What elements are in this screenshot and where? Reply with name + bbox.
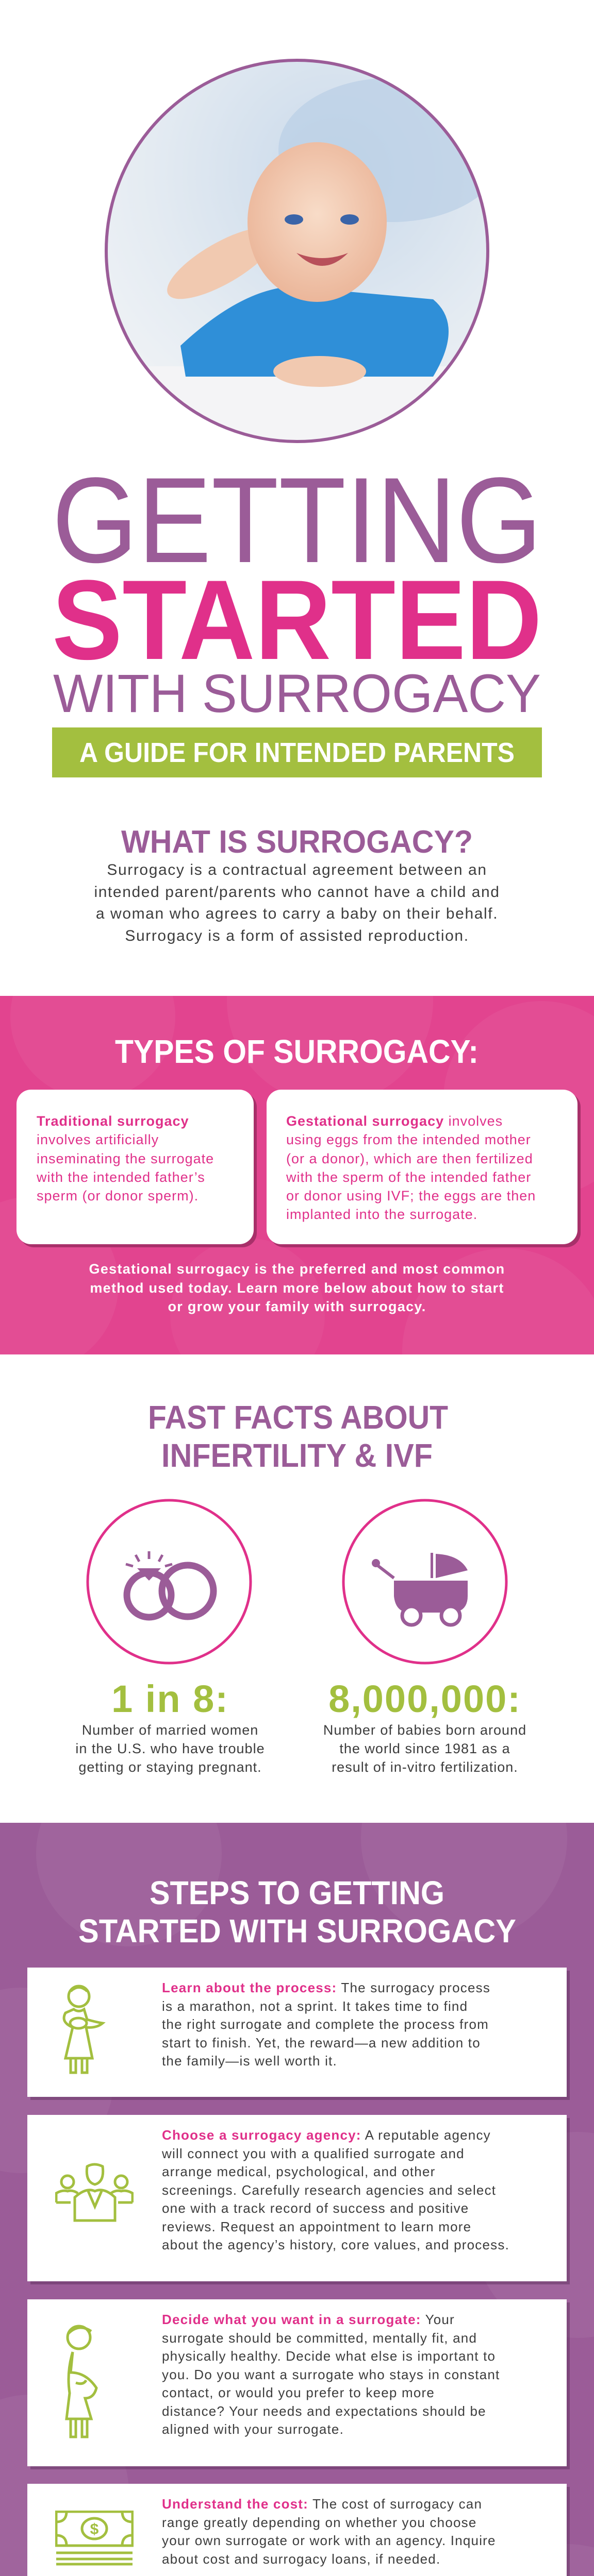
text: gestational note	[89, 1261, 505, 1314]
step 2: choose a surrogacy agency: about the agency’s history, core values, and process.	[162, 2237, 509, 2252]
step 4: understand the cost: range greatly depending on whether you choose	[162, 2514, 477, 2530]
step 4: understand the cost	[27, 2484, 567, 2576]
card: traditional surrogacy: with the intended father’s	[37, 1170, 205, 1185]
title: getting started with surrogacy: STARTED	[52, 556, 542, 683]
stat: 1 in 8: in the U.S. who have trouble	[75, 1741, 265, 1756]
hero photo: baby in circle	[105, 59, 489, 443]
step 3: decide what you want in a surrogate: you. Do you want a surrogate who stays in constant	[162, 2367, 500, 2382]
title: getting started with surrogacy	[52, 464, 542, 721]
step 3: decide what you want in a surrogate: aligned with your surrogate.	[162, 2421, 344, 2437]
step 3: decide what you want in a surrogate: Decide what you want in a surrogate: Your	[162, 2312, 455, 2327]
heading: fast facts: INFERTILITY & IVF	[161, 1437, 433, 1473]
step 4: understand the cost: Understand the cost: The cost of surrogacy can	[162, 2496, 482, 2512]
step 4: understand the cost: your own surrogate or work with an agency. Inquire	[162, 2533, 496, 2548]
card: gestational surrogacy: implanted into the surrogate.	[286, 1207, 477, 1222]
step 1: learn about the process: is a marathon, not a sprint. It takes time to find	[162, 1998, 468, 2013]
text: gestational note: method used today. Learn more below about how to start	[90, 1280, 504, 1295]
step 1: learn about the process: Learn about the process: The surrogacy process	[162, 1980, 490, 1995]
icon: agency people	[55, 2163, 134, 2222]
stat: 8,000,000: Number of babies born around	[323, 1722, 526, 1738]
card: gestational surrogacy: or donor using IVF; the eggs are then	[286, 1188, 536, 1204]
stat: 8,000,000: the world since 1981 as a	[339, 1741, 510, 1756]
step 3: decide what you want in a surrogate: distance? Your needs and expectations should be	[162, 2403, 486, 2418]
card: gestational surrogacy: using eggs from the intended mother	[286, 1132, 531, 1147]
text: gestational note: or grow your family with surrogacy.	[168, 1299, 426, 1314]
text: surrogacy definition	[94, 861, 500, 944]
step 2: choose a surrogacy agency: Choose a surrogacy agency: A reputable agency	[162, 2127, 491, 2143]
stat: 8,000,000: result of in-vitro fertilization.	[332, 1759, 518, 1775]
step 2: choose a surrogacy agency: reviews. Request an appointment to learn more	[162, 2218, 471, 2234]
stat: 1 in 8	[75, 1677, 265, 1775]
icon: mother with baby	[63, 1985, 106, 2074]
card: gestational surrogacy: Gestational surrogacy involves	[286, 1113, 503, 1129]
text: surrogacy definition: a woman who agrees to carry a baby on their behalf.	[96, 905, 498, 922]
step 3: decide what you want in a surrogate	[27, 2299, 567, 2466]
icon: money	[55, 2511, 134, 2566]
panel: types of surrogacy	[0, 996, 594, 1354]
text: surrogacy definition: Surrogacy is a form of assisted reproduction.	[125, 927, 469, 944]
step 1: learn about the process: the right surrogate and complete the process from	[162, 2016, 489, 2032]
step 2: choose a surrogacy agency: arrange medical, psychological, and other	[162, 2164, 435, 2179]
step 2: choose a surrogacy agency: one with a track record of success and positive	[162, 2200, 469, 2216]
text: gestational note: Gestational surrogacy is the preferred and most common	[89, 1261, 505, 1277]
card: gestational surrogacy	[267, 1090, 578, 1244]
step 2: choose a surrogacy agency	[27, 2115, 567, 2281]
card: traditional surrogacy: sperm (or donor sperm).	[37, 1188, 199, 1204]
icon: money: $	[90, 2521, 99, 2538]
step 3: decide what you want in a surrogate: physically healthy. Decide what else is important to	[162, 2348, 496, 2364]
step 1: learn about the process: start to finish. Yet, the reward—a new addition to	[162, 2035, 481, 2050]
card: traditional surrogacy: inseminating the surrogate	[37, 1151, 214, 1166]
card: traditional surrogacy	[16, 1090, 254, 1244]
card: gestational surrogacy: with the sperm of the intended father	[286, 1170, 531, 1185]
heading: fast facts	[148, 1401, 448, 1473]
stat: 8,000,000: 8,000,000:	[328, 1677, 521, 1720]
step 3: decide what you want in a surrogate: surrogate should be committed, mentally fit, and	[162, 2330, 477, 2345]
card: traditional surrogacy: Traditional surrogacy	[37, 1113, 189, 1129]
text: surrogacy definition: Surrogacy is a contractual agreement between an	[107, 861, 487, 878]
heading: steps	[78, 1874, 516, 1946]
subtitle banner: A GUIDE FOR INTENDED PARENTS	[79, 737, 515, 768]
stat: 8,000,000	[323, 1677, 526, 1775]
card: gestational surrogacy: (or a donor), which are then fertilized	[286, 1151, 533, 1166]
stat: 1 in 8: 1 in 8:	[111, 1677, 229, 1720]
stat: 1 in 8: getting or staying pregnant.	[78, 1759, 262, 1775]
panel: steps to getting started	[0, 1823, 594, 2576]
icon: stroller circle	[342, 1499, 507, 1664]
subtitle banner	[52, 727, 542, 777]
step 4: understand the cost: about cost and surrogacy loans, if needed.	[162, 2551, 440, 2567]
card: traditional surrogacy: involves artificially	[37, 1132, 159, 1147]
step 3: decide what you want in a surrogate: contact, or would you prefer to keep more	[162, 2385, 435, 2400]
icon: pregnant woman	[65, 2325, 98, 2438]
heading: steps: STEPS TO GETTING	[150, 1874, 444, 1911]
step 2: choose a surrogacy agency: will connect you with a qualified surrogate and	[162, 2145, 465, 2161]
step 1: learn about the process	[27, 1968, 567, 2097]
step 1: learn about the process: the family—is well worth it.	[162, 2053, 337, 2069]
icon: rings circle	[87, 1499, 252, 1664]
text: surrogacy definition: intended parent/parents who cannot have a child and	[94, 883, 500, 901]
stat: 1 in 8: Number of married women	[82, 1722, 258, 1738]
step 2: choose a surrogacy agency: screenings. Carefully research agencies and select	[162, 2182, 496, 2198]
